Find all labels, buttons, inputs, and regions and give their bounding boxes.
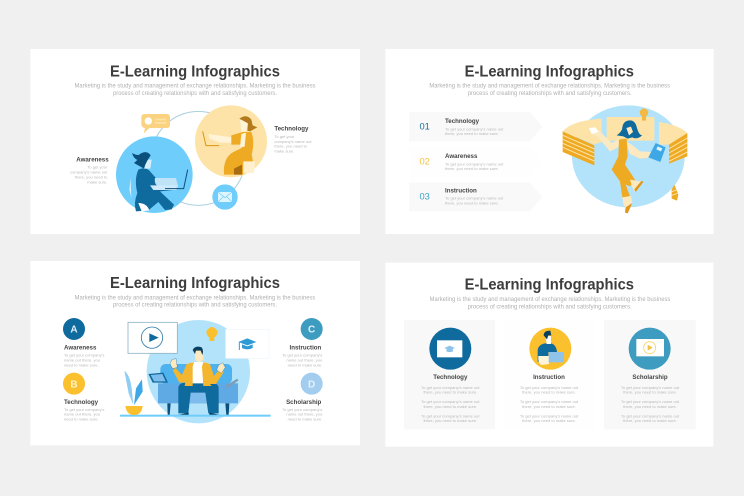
list item 02: Awareness (445, 153, 478, 160)
topic C: C (308, 325, 315, 336)
subtitle: process of creating relationships with and satisfying customers. (113, 303, 277, 309)
column: Instruction: there, you need to make sure. (522, 404, 576, 409)
topic C: To get your company's (282, 353, 322, 358)
column: Technology: there, you need to make sure. (423, 404, 477, 409)
topic B: name out there, you (64, 412, 100, 417)
subtitle: process of creating relationships with and satisfying customers. (113, 91, 277, 97)
illustration: woman seated with screen (195, 105, 267, 177)
topic D: name out there, you (286, 412, 322, 417)
title: E-Learning Infographics (110, 275, 280, 292)
panel: relationship cycle (30, 49, 360, 234)
column: Instruction: Instruction (533, 374, 565, 381)
column: Instruction: there, you need to make sure. (522, 390, 576, 395)
label: Awareness: Awareness (76, 157, 109, 164)
subtitle (430, 297, 670, 310)
subtitle (75, 295, 315, 309)
topic A: need to make sure. (64, 362, 99, 367)
list item 01: Technology (445, 118, 480, 125)
column: Technology: there, you need to make sure. (423, 390, 477, 395)
list item 01 (409, 112, 542, 141)
list item 02: To get your company's name out (445, 161, 504, 166)
column: Instruction: To get your company's name out (520, 399, 579, 404)
label: Technology: make sure. (274, 149, 294, 154)
topic D: Scholarship (286, 399, 322, 406)
list item 03 (409, 183, 542, 211)
column: Technology (404, 320, 495, 429)
column: Scholarship: there, you need to make sure. (623, 404, 677, 409)
column: Scholarship: there, you need to make sure. (623, 418, 677, 423)
illustration: woman with floating screens (563, 105, 687, 213)
column: Instruction: To get your company's name out (520, 413, 579, 418)
column: Scholarship: Scholarship (632, 374, 668, 381)
topic B (63, 373, 104, 422)
column: Scholarship (604, 320, 696, 429)
list item 01: 01 (419, 122, 430, 132)
topic D: need to make sure. (288, 417, 322, 422)
topic C: name out there, you (286, 357, 322, 362)
topic A: name out there, you (64, 357, 100, 362)
subtitle: process of creating relationships with and satisfying customers. (468, 304, 632, 310)
subtitle (74, 84, 316, 97)
label: Technology: company's name out (274, 139, 312, 144)
topic A: To get your company's (64, 353, 104, 358)
panel: three columns (385, 263, 713, 447)
connecting ring (151, 111, 245, 205)
label: Awareness: company's name out (70, 169, 108, 174)
topic B: B (70, 379, 78, 390)
list item 02: there, you need to make sure. (445, 166, 499, 171)
title: E-Learning Infographics (110, 63, 280, 80)
column: Instruction: there, you need to make sure. (522, 418, 576, 423)
illustration: man on sofa (120, 320, 271, 423)
column: Scholarship: To get your company's name out (621, 413, 680, 418)
topic B: To get your company's (64, 407, 104, 412)
list item 03: Instruction (445, 187, 477, 194)
label: Technology: To get your (274, 134, 295, 139)
topic C (282, 318, 323, 367)
icon: envelope in circle (212, 184, 238, 210)
topic D: D (308, 379, 315, 390)
topic C: Instruction (290, 345, 322, 352)
title: E-Learning Infographics (465, 277, 634, 294)
subtitle (429, 84, 670, 97)
subtitle: Marketing is the study and management of exchange relationships. Marketing is the business (430, 297, 670, 303)
label: Technology: there, you need to (274, 144, 308, 149)
column: Technology: Technology (433, 374, 468, 381)
panel: numbered list (385, 49, 714, 234)
label: Technology (274, 126, 312, 154)
subtitle: Marketing is the study and management of exchange relationships. Marketing is the business (74, 84, 316, 90)
list item 01: there, you need to make sure. (445, 131, 499, 136)
column: Technology: there, you need to make sure. (423, 418, 477, 423)
illustration: woman at laptop (116, 136, 193, 213)
column: Scholarship: there, you need to make sure. (623, 390, 677, 395)
column: Instruction: To get your company's name out (520, 385, 579, 390)
subtitle: Marketing is the study and management of exchange relationships. Marketing is the business (75, 295, 315, 301)
topic D (282, 373, 323, 422)
label: Awareness: there, you need to (75, 174, 108, 179)
column: Technology: To get your company's name out (421, 385, 480, 390)
topic B: Technology (64, 399, 99, 406)
list item 03: To get your company's name out (445, 196, 504, 201)
list item 01: To get your company's name out (445, 126, 504, 131)
icon: speech bubble (141, 114, 170, 133)
list item 02: 02 (419, 157, 430, 167)
subtitle: process of creating relationships with and satisfying customers. (468, 91, 632, 97)
topic A (63, 318, 104, 367)
column: Scholarship: To get your company's name out (621, 399, 680, 404)
topic A: Awareness (64, 345, 97, 352)
label: Awareness: To get your (87, 164, 108, 169)
label: Technology: Technology (274, 126, 309, 133)
column: Technology: To get your company's name out (421, 399, 480, 404)
list item 03: 03 (419, 191, 430, 201)
label: Awareness: make sure. (87, 179, 107, 184)
list item 03: there, you need to make sure. (445, 200, 499, 205)
subtitle: Marketing is the study and management of exchange relationships. Marketing is the business (429, 84, 670, 90)
column: Technology: To get your company's name out (421, 413, 480, 418)
topic A: A (70, 325, 78, 336)
column: Scholarship: To get your company's name out (621, 385, 680, 390)
column: Instruction (504, 320, 595, 429)
title: E-Learning Infographics (465, 63, 634, 80)
label: Awareness (70, 157, 109, 184)
list item 02 (409, 147, 542, 177)
topic B: need to make sure. (64, 417, 99, 422)
topic D: To get your company's (282, 407, 322, 412)
topic C: need to make sure. (288, 362, 322, 367)
panel: A B C D topics (30, 261, 360, 445)
